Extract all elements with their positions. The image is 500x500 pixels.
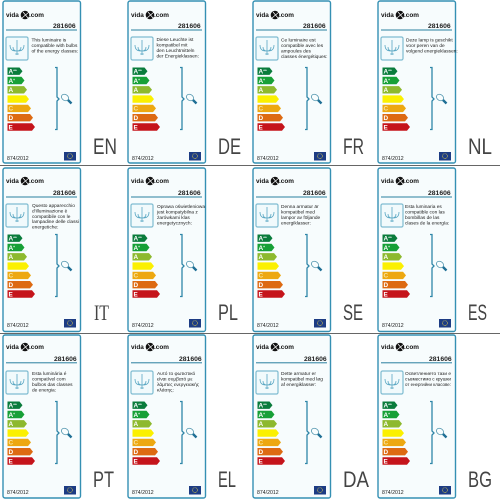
panel: SE: 281606 xyxy=(303,190,326,197)
panel: IT xyxy=(3,168,80,332)
panel: NL xyxy=(378,1,458,163)
panel: IT: compatibile con le xyxy=(32,214,71,220)
panel: EL: κλάσης: xyxy=(157,386,174,394)
panel: DE: A xyxy=(134,78,140,85)
panel: ES: E xyxy=(384,291,388,298)
panel: PL: .com xyxy=(154,178,169,185)
panel: SE: ++ xyxy=(263,236,267,240)
panel: FR: compatible avec les xyxy=(281,43,324,49)
panel: FR: A xyxy=(258,87,264,94)
panel: EN: A xyxy=(8,78,15,85)
panel: ES: .com xyxy=(404,178,419,185)
panel: ES: ++ xyxy=(388,236,392,240)
panel: EN: A xyxy=(8,68,17,76)
language code: NL: NL xyxy=(468,134,492,159)
panel: ES: clases de la energía: xyxy=(405,220,449,226)
panel: ES: C xyxy=(384,273,388,280)
panel: DE: Diese Leuchte ist xyxy=(156,37,194,43)
panel: IT: E xyxy=(8,291,14,298)
language code: DE: DE xyxy=(218,134,241,159)
panel: PL: E xyxy=(134,291,138,298)
language code: BG: BG xyxy=(468,467,492,492)
panel: PL: energetycznych: xyxy=(157,220,192,226)
panel: EL: .com xyxy=(154,344,169,351)
panel: BG: vida xyxy=(381,344,394,351)
panel: EL: ++ xyxy=(138,402,142,406)
panel: BG: D xyxy=(384,449,388,456)
panel: NL: A xyxy=(384,68,392,76)
panel: DA: 874/2012 xyxy=(257,490,279,496)
panel: DA: D xyxy=(258,449,264,456)
panel: EN: of the energy classes: xyxy=(32,48,78,54)
panel: PT: 281606 xyxy=(54,356,77,363)
panel: DA: vida xyxy=(256,344,269,351)
panel: EL: E xyxy=(134,458,138,465)
panel: EL: D xyxy=(134,449,138,456)
panel: EN: E xyxy=(8,124,14,131)
panel: EL: είναι συμβατό με xyxy=(157,376,193,382)
panel: DE: C xyxy=(134,106,138,113)
panel: FR: D xyxy=(258,115,264,122)
panel: ES: 874/2012 xyxy=(382,323,404,329)
panel: PT: 874/2012 xyxy=(7,490,29,496)
panel: PT: E xyxy=(8,458,14,465)
panel: IT: A xyxy=(8,236,17,242)
language code: EL: EL xyxy=(218,467,236,492)
panel: IT: C xyxy=(8,273,14,280)
panel: DE: A xyxy=(134,68,142,76)
panel: ES xyxy=(378,168,456,332)
panel: BG: .com xyxy=(404,344,419,351)
panel: EL: 281606 xyxy=(179,356,202,363)
panel: PL: żarówkami klas xyxy=(157,215,190,221)
language code: SE: SE xyxy=(343,300,363,325)
panel: PT: A xyxy=(8,421,14,428)
panel: DA: A xyxy=(258,402,267,410)
panel: BG: 281606 xyxy=(429,356,452,363)
panel: DE: der Energieklassen: xyxy=(156,54,199,60)
panel: EL: 874/2012 xyxy=(132,490,154,496)
panel: NL: voor peren van de xyxy=(406,43,445,49)
panel: NL: .com xyxy=(404,12,419,19)
panel: PL: D xyxy=(134,282,138,289)
panel: PT: compatível com xyxy=(32,376,66,382)
panel: IT: ++ xyxy=(13,236,17,240)
panel: DA: + xyxy=(263,412,265,416)
panel: DA: Dette armatur er xyxy=(281,371,316,377)
panel: BG: ++ xyxy=(388,402,392,406)
panel: DA: kompatibel med løg xyxy=(281,376,323,382)
panel: DA: E xyxy=(258,458,264,465)
panel: FR: + xyxy=(263,78,265,82)
panel: PL: A xyxy=(134,254,138,261)
panel: PL: jest kompatybilna z xyxy=(156,210,198,216)
panel: PT: A xyxy=(8,412,15,419)
panel: PT xyxy=(3,335,80,498)
panel: PL: A xyxy=(134,245,140,252)
panel: BG: E xyxy=(384,458,388,465)
panel: FR: Ce luminaire est xyxy=(281,38,316,44)
panel: DE: kompatibel mit xyxy=(156,42,188,48)
panel: PL: C xyxy=(134,273,138,280)
panel: NL: E xyxy=(384,124,388,131)
language code: EN: EN xyxy=(93,134,117,159)
panel: PT: A xyxy=(8,402,17,410)
panel: DE: 874/2012 xyxy=(132,156,154,162)
panel: IT: 874/2012 xyxy=(7,323,29,329)
panel: SE: D xyxy=(258,282,264,289)
panel: PL: + xyxy=(138,245,140,249)
panel: BG: Осветлението тази е xyxy=(405,371,451,377)
panel: DE: E xyxy=(134,124,138,131)
panel: SE: C xyxy=(258,273,264,280)
panel: SE: vida xyxy=(256,178,269,185)
panel: IT: d'illuminazione è xyxy=(32,208,68,214)
panel: DE: .com xyxy=(154,12,169,19)
panel: PL: 874/2012 xyxy=(132,323,154,329)
panel: ES: compatible con las xyxy=(405,210,445,216)
panel: BG: съвместимо с крушки xyxy=(405,378,451,382)
language code: PT: PT xyxy=(93,467,114,492)
panel: FR: 874/2012 xyxy=(257,156,279,162)
panel: EN: C xyxy=(8,106,14,113)
panel: IT: energetiche: xyxy=(32,225,58,231)
panel: FR: C xyxy=(258,106,264,113)
panel: FR: E xyxy=(258,124,264,131)
panel: SE: energiklasser: xyxy=(281,220,311,226)
panel: EN xyxy=(3,1,80,163)
panel: PT: C xyxy=(8,440,14,447)
panel: EL: A xyxy=(134,412,140,419)
panel: NL: Deze lamp is geschikt xyxy=(406,38,453,44)
panel: FR: 281606 xyxy=(303,23,326,30)
panel: NL: D xyxy=(384,115,388,122)
panel: SE: lampor av följande xyxy=(281,215,321,221)
panel: DA xyxy=(253,335,330,498)
panel: EN: ++ xyxy=(13,68,17,72)
panel: FR: A xyxy=(258,78,265,85)
panel: BG: C xyxy=(384,440,388,447)
panel: ES: Esta luminaria es xyxy=(405,204,442,210)
panel: IT: vida xyxy=(6,178,19,185)
panel: FR: ampoules des xyxy=(281,48,311,54)
panel: DE xyxy=(128,1,206,163)
panel: ES: A xyxy=(384,245,390,252)
panel: NL: A xyxy=(384,78,390,85)
panel: NL: + xyxy=(388,78,390,82)
panel: EL xyxy=(128,335,206,498)
panel: EL: vida xyxy=(131,344,144,351)
panel: NL: C xyxy=(384,106,388,113)
panel: PL xyxy=(128,168,206,332)
panel: EN: This luminaire is xyxy=(32,38,67,44)
panel: PT: .com xyxy=(29,344,44,351)
panel: EN: vida xyxy=(6,12,19,19)
language code: FR: FR xyxy=(343,134,364,159)
panel: PL: ++ xyxy=(138,236,142,240)
panel: DE: A xyxy=(134,87,138,94)
panel: NL: vida xyxy=(381,12,394,19)
panel: DA: C xyxy=(258,440,264,447)
panel: PL: A xyxy=(134,236,142,242)
panel: EN: compatible with bulbs xyxy=(32,43,78,49)
panel: DA: ++ xyxy=(263,402,267,406)
panel: ES: A xyxy=(384,236,392,242)
panel: FR: classes énergétiques: xyxy=(281,54,327,60)
panel: FR: .com xyxy=(279,12,294,19)
panel: NL: 874/2012 xyxy=(382,156,404,162)
panel: IT: 281606 xyxy=(53,190,76,197)
panel: ES: 281606 xyxy=(428,190,451,197)
panel: IT: A xyxy=(8,245,15,252)
panel: BG: 874/2012 xyxy=(382,490,404,496)
panel: FR: A xyxy=(258,68,267,76)
panel: DA: .com xyxy=(279,344,294,351)
panel: BG: A xyxy=(384,412,390,419)
panel: PT: + xyxy=(13,412,15,416)
panel: EL: Αυτό το φωτιστικό xyxy=(157,370,196,377)
panel: BG: A xyxy=(384,421,388,428)
panel: PL: Oprawa oświetleniowa xyxy=(157,204,205,210)
panel: PL: 281606 xyxy=(178,190,201,197)
language code: ES: ES xyxy=(468,300,487,325)
panel: SE: E xyxy=(258,291,264,298)
panel: DE: 281606 xyxy=(178,23,201,30)
panel: DA: 281606 xyxy=(304,356,327,363)
panel: BG: + xyxy=(388,412,390,416)
panel: DE: vida xyxy=(131,12,144,19)
panel: IT: A xyxy=(8,254,14,261)
panel: EN: .com xyxy=(29,12,44,19)
panel: EN: D xyxy=(8,115,14,122)
panel: SE: + xyxy=(263,245,265,249)
panel: EN: 874/2012 xyxy=(7,156,29,162)
panel: SE xyxy=(253,168,330,332)
panel: NL: ++ xyxy=(388,68,392,72)
panel: DA: A xyxy=(258,421,264,428)
panel: BG xyxy=(378,335,456,498)
panel: DE: + xyxy=(138,78,140,82)
panel: NL: A xyxy=(384,87,388,94)
panel: DA: af energiklasser: xyxy=(281,382,316,388)
panel: EN: 281606 xyxy=(53,23,76,30)
panel: IT: + xyxy=(13,245,15,249)
language code: PL: PL xyxy=(218,300,238,325)
panel: SE: Denna armatur är xyxy=(281,204,319,210)
panel: ES: bombillas de las xyxy=(405,215,440,221)
panel: PT: vida xyxy=(6,344,19,351)
panel: SE: A xyxy=(258,254,264,261)
panel: SE: 874/2012 xyxy=(257,323,279,329)
panel: PT: Esta luminária é xyxy=(32,371,67,377)
panel: IT: .com xyxy=(29,178,44,185)
panel: DE: den Leuchtmitteln xyxy=(156,48,195,54)
panel: SE: A xyxy=(258,236,267,242)
language code: IT: IT xyxy=(94,300,109,325)
panel: DA: A xyxy=(258,412,265,419)
panel: PT: bulbos das classes xyxy=(32,382,73,388)
panel: PT: de energia: xyxy=(32,388,56,394)
panel: SE: kompatibel med xyxy=(281,210,315,216)
panel: ES: + xyxy=(388,245,390,249)
panel: FR: ++ xyxy=(263,68,267,72)
panel: SE: .com xyxy=(279,178,294,185)
panel: ES: A xyxy=(384,254,388,261)
panel: DE: D xyxy=(134,115,138,122)
panel: BG: от енергийни класове: xyxy=(405,381,451,388)
panel: NL: volgend energieklassen: xyxy=(406,48,458,54)
panel: ES: D xyxy=(384,282,388,289)
panel: PL: vida xyxy=(131,178,144,185)
panel: EL: A xyxy=(134,421,138,428)
panel: EL: + xyxy=(138,412,140,416)
panel: PT: D xyxy=(8,449,14,456)
panel: FR: vida xyxy=(256,12,269,19)
panel: FR xyxy=(253,1,330,163)
panel: EN: A xyxy=(8,87,14,94)
panel: BG: A xyxy=(384,402,392,410)
language code: DA: DA xyxy=(343,467,369,492)
panel: EN: + xyxy=(13,78,15,82)
panel: DE: ++ xyxy=(138,68,142,72)
panel: IT: lampadine delle classi xyxy=(32,219,79,225)
panel: NL: 281606 xyxy=(428,23,451,30)
panel: IT: D xyxy=(8,282,14,289)
panel: EL: A xyxy=(134,402,142,410)
panel: SE: A xyxy=(258,245,265,252)
panel: IT: Questo apparecchio xyxy=(32,203,75,209)
panel: PT: ++ xyxy=(13,402,17,406)
panel: EL: λάμπες ενεργειακής xyxy=(157,381,200,388)
panel: EL: C xyxy=(134,440,138,447)
panel: ES: vida xyxy=(381,178,394,185)
